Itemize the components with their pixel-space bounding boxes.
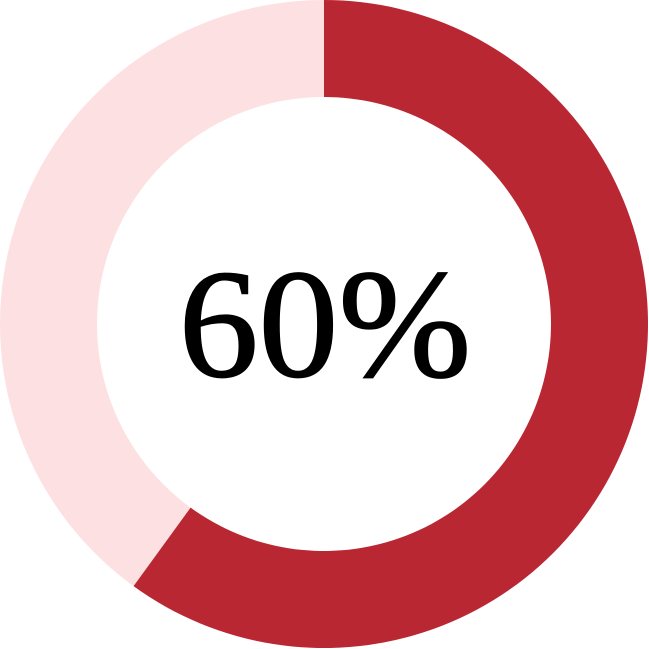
center value: 60% — [179, 239, 471, 410]
filled segment: 60% — [134, 0, 648, 648]
remaining segment: 40% — [0, 0, 324, 586]
